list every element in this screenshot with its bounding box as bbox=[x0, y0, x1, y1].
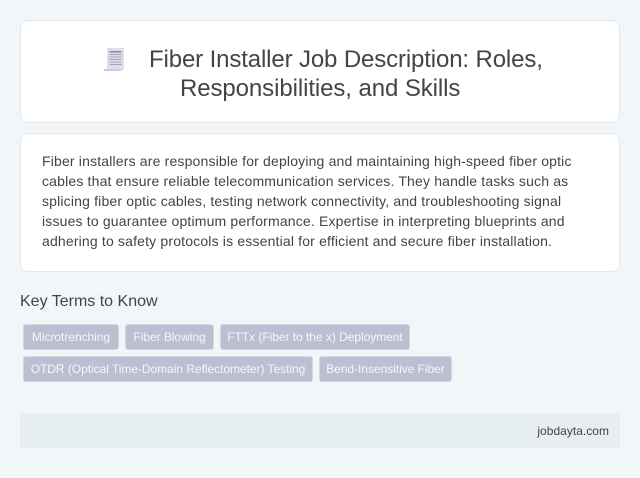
tag: Bend-Insensitive Fiber bbox=[326, 362, 445, 376]
title: Fiber Installer Job Description: Roles, bbox=[149, 46, 543, 73]
title bbox=[149, 46, 543, 102]
description text: splicing fiber optic cables, testing network connectivity, and troubleshooting signal bbox=[42, 193, 561, 209]
description text: Fiber installers are responsible for deploying and maintaining high-speed fiber optic bbox=[42, 153, 572, 169]
tag bbox=[319, 356, 452, 382]
tag bbox=[23, 356, 313, 382]
tag list bbox=[23, 324, 452, 382]
tag: Microtrenching bbox=[32, 330, 110, 344]
footer bar bbox=[20, 414, 620, 448]
description text: issues to guarantee optimum performance. Expertise in interpreting blueprints and bbox=[42, 213, 565, 229]
tag bbox=[23, 324, 119, 350]
description text: cables that ensure reliable telecommunication services. They handle tasks such as bbox=[42, 173, 568, 189]
title: Responsibilities, and Skills bbox=[180, 75, 460, 102]
description text bbox=[42, 153, 572, 249]
heading: key terms: Key Terms to Know bbox=[20, 293, 158, 310]
description card bbox=[20, 133, 620, 272]
tag: FTTx (Fiber to the x) Deployment bbox=[227, 330, 403, 344]
icon: document scroll bbox=[104, 48, 124, 71]
header card bbox=[20, 20, 620, 123]
tag: OTDR (Optical Time-Domain Reflectometer) Testing bbox=[31, 362, 305, 376]
description text: adhering to safety protocols is essential for efficient and secure fiber installation. bbox=[42, 233, 552, 249]
footer site name: jobdayta.com bbox=[537, 424, 609, 438]
tag: Fiber Blowing bbox=[133, 330, 206, 344]
tag bbox=[125, 324, 214, 350]
tag bbox=[220, 324, 410, 350]
